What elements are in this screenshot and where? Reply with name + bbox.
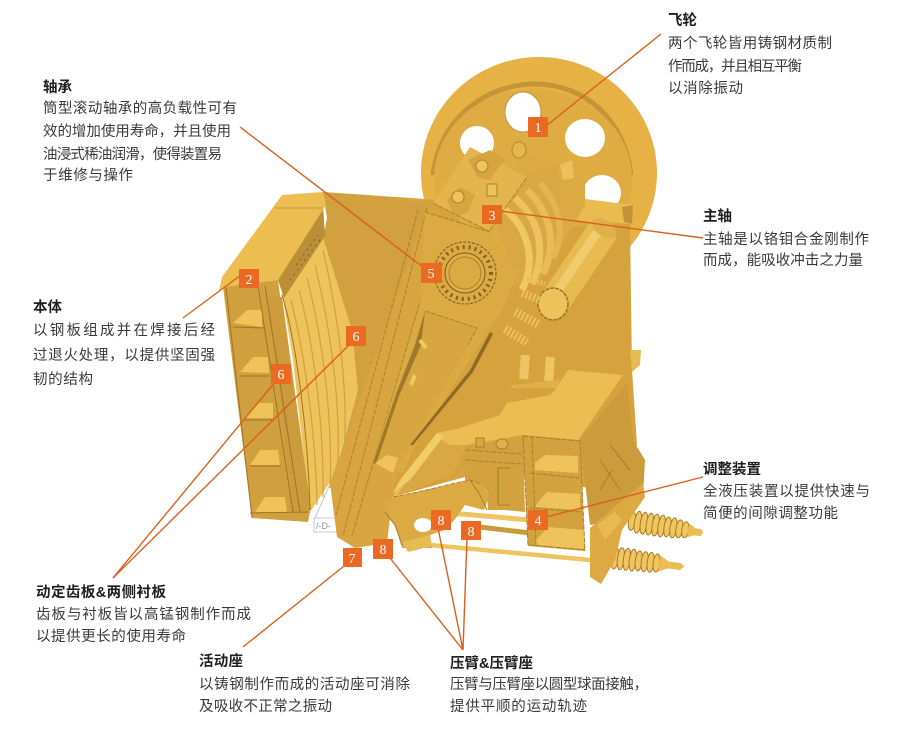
upper block with bolts <box>433 147 527 232</box>
text block: swing seat: 及吸收不正常之振动 <box>199 698 332 715</box>
text block: adjusting device: 调整装置 <box>703 461 761 478</box>
tie rods <box>430 513 590 560</box>
large spring lower <box>604 546 686 577</box>
number marker 6 upper: 6 <box>352 330 360 345</box>
text block: adjusting device <box>703 461 870 522</box>
text block: bearing: 筒型滚动轴承的高负载性可有 <box>43 100 237 117</box>
text block: body: 过退火处理，以提供坚固强 <box>33 347 215 364</box>
number marker 4: 4 <box>534 514 542 529</box>
number marker 6 lower <box>271 364 291 384</box>
main side plate <box>323 192 637 497</box>
feed box front face <box>223 280 311 522</box>
flywheel <box>421 57 657 289</box>
number marker 8 b <box>461 521 481 540</box>
swing jaw <box>330 208 440 548</box>
text block: main shaft: 主轴是以铬钼合金刚制作 <box>703 231 869 248</box>
text block: flywheel: 以消除振动 <box>668 80 743 97</box>
text block: main shaft: 主轴 <box>703 207 732 225</box>
text block: toggle plate: 压臂与压臂座以圆型球面接触， <box>450 676 648 693</box>
main plate upper left <box>278 192 432 480</box>
toggle plate and seat <box>385 480 490 552</box>
right side frame <box>580 350 645 525</box>
crusher machine illustration <box>219 57 705 584</box>
text block: flywheel: 作而成，并且相互平衡 <box>668 58 802 75</box>
text block: adjusting device: 简便的间隙调整功能 <box>703 505 838 522</box>
number marker 8 c: 8 <box>380 543 386 558</box>
tension springs small <box>505 279 545 342</box>
back wall liner ribs <box>282 238 358 512</box>
white label tag: /-D- <box>316 521 331 531</box>
adjusting bracket <box>590 483 645 584</box>
middle block <box>465 437 525 512</box>
text block: bearing: 于维修与操作 <box>43 167 133 184</box>
text block: jaw plates: 齿板与衬板皆以高锰钢制作而成 <box>36 605 251 623</box>
text block: jaw plates: 以提供更长的使用寿命 <box>36 627 186 645</box>
pitman <box>373 212 518 473</box>
cylinder <box>538 213 620 320</box>
number marker 4 <box>528 510 548 530</box>
bearing housing <box>500 142 585 280</box>
text block: main shaft <box>703 207 869 269</box>
white label tag <box>314 482 345 537</box>
text block: body: 韧的结构 <box>33 371 93 388</box>
text block: bearing <box>43 79 237 184</box>
text block: adjusting device: 全液压装置以提供快速与 <box>703 482 870 500</box>
text block: body: 以钢板组成并在焊接后经 <box>33 321 215 339</box>
text block: swing seat: 以铸钢制作而成的活动座可消除 <box>199 676 410 693</box>
text block: toggle plate <box>450 654 648 715</box>
text block: main shaft: 而成，能吸收冲击之力量 <box>703 252 863 269</box>
number marker 5: 5 <box>428 267 434 282</box>
text block: body <box>33 299 215 388</box>
adjusting box <box>523 435 585 551</box>
eccentric shaft <box>497 167 563 290</box>
number marker 2 <box>239 269 259 288</box>
number marker 1 <box>528 117 548 137</box>
large spring upper <box>627 510 705 543</box>
number marker 3 <box>482 205 502 224</box>
text block: bearing: 效的增加使用寿命，并且使用 <box>43 122 231 140</box>
callout lines <box>113 34 703 650</box>
text block: swing seat: 活动座 <box>199 652 243 670</box>
text block: toggle plate: 提供平顺的运动轨迹 <box>450 698 587 715</box>
number marker 8 c <box>373 539 393 559</box>
number marker 8 a: 8 <box>438 514 444 529</box>
text block: toggle plate: 压臂&压臂座 <box>450 654 533 672</box>
number marker 7 <box>343 548 362 567</box>
text block: body: 本体 <box>33 299 62 316</box>
feed box top face <box>219 192 326 291</box>
text block: flywheel: 飞轮 <box>668 12 697 29</box>
text block: bearing: 油浸式稀油润滑，使得装置易 <box>43 146 222 163</box>
number marker 1: 1 <box>534 121 542 136</box>
adjusting device top face <box>393 370 623 497</box>
number marker 8 b: 8 <box>468 525 474 540</box>
small brackets on plate <box>510 355 560 418</box>
number marker 2: 2 <box>246 273 252 288</box>
bearing <box>434 242 496 304</box>
text block: jaw plates: 动定齿板&两侧衬板 <box>36 583 166 601</box>
text block: jaw plates <box>36 583 251 645</box>
number marker 6 lower: 6 <box>278 368 284 383</box>
number marker 3: 3 <box>488 209 496 224</box>
number marker 5 <box>421 263 442 283</box>
number marker 7: 7 <box>348 552 356 567</box>
text block: bearing: 轴承 <box>43 79 72 96</box>
text block: flywheel <box>668 12 832 97</box>
number marker 8 a <box>431 510 451 530</box>
number marker 6 upper <box>346 326 366 346</box>
text block: swing seat <box>199 652 410 715</box>
text block: flywheel: 两个飞轮皆用铸钢材质制 <box>668 35 832 52</box>
